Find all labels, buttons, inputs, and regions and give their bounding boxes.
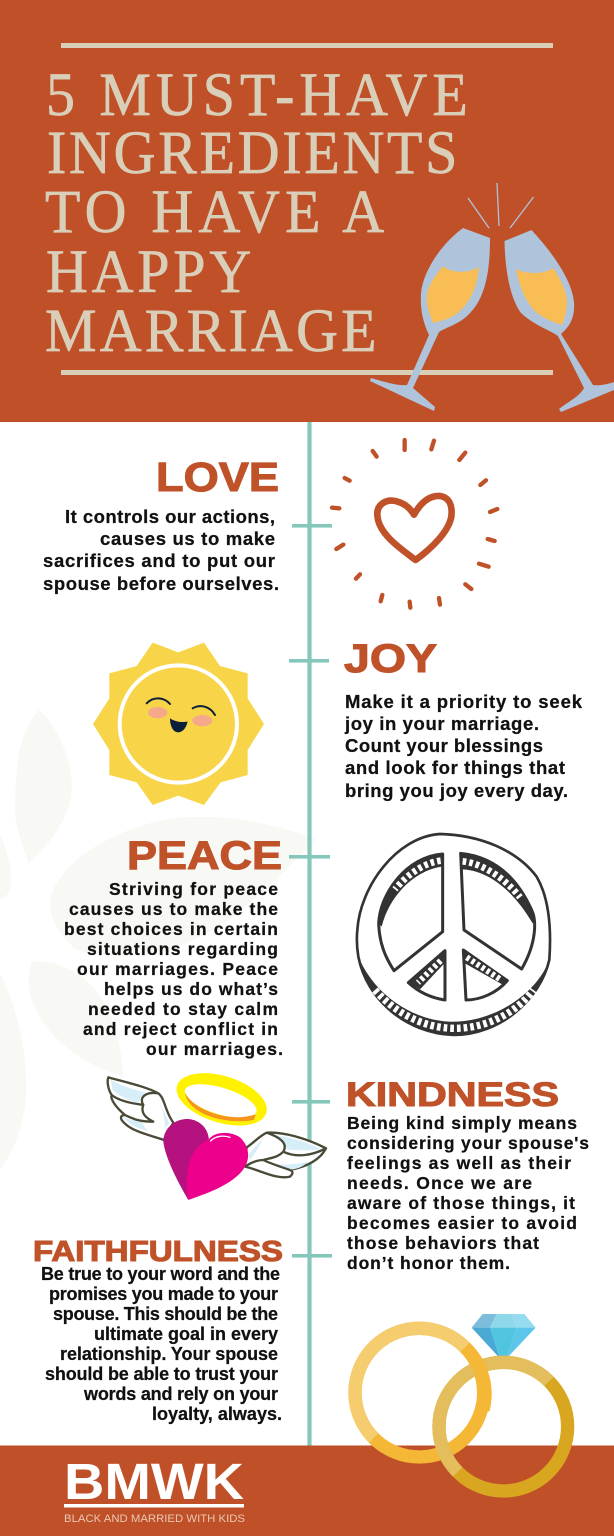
text: peace: Striving for peace — [109, 879, 278, 899]
panel: peace — [64, 834, 550, 1059]
panel: kindness — [108, 1063, 589, 1273]
text: peace: best choices in certain — [64, 919, 278, 939]
text: joy: Count your blessings — [345, 735, 543, 756]
text: joy: and look for things that — [345, 757, 565, 778]
text: faithfulness: Be true to your word and the — [41, 1264, 280, 1284]
text: faithfulness: ultimate goal in every — [94, 1324, 278, 1344]
text: love: spouse before ourselves. — [43, 573, 279, 594]
title — [45, 61, 468, 364]
panel: joy — [93, 637, 583, 805]
text: kindness: needs. Once we are — [347, 1173, 532, 1193]
text: peace: causes us to make the — [69, 899, 278, 919]
text: peace — [64, 879, 283, 1059]
text: joy: Make it a priority to seek — [345, 691, 583, 712]
text: faithfulness — [41, 1264, 282, 1424]
background leaves — [0, 710, 317, 1170]
text: faithfulness: should be able to trust your — [45, 1364, 278, 1384]
text: peace: our marriages. — [146, 1039, 283, 1059]
text: kindness: feelings as well as their — [347, 1153, 571, 1173]
text: peace: our marriages. Peace — [77, 959, 278, 979]
text: kindness: considering your spouse's — [347, 1133, 589, 1153]
heading: joy: JOY — [344, 637, 437, 681]
text: kindness: those behaviors that — [347, 1233, 539, 1253]
timeline — [289, 422, 332, 1446]
panel: header — [0, 0, 614, 422]
text: faithfulness: spouse. This should be the — [53, 1304, 278, 1324]
text: peace: situations regarding — [87, 939, 278, 959]
icon: winged heart with halo — [108, 1063, 326, 1200]
heading: faithfulness: FAITHFULNESS — [33, 1236, 283, 1268]
icon: smiling sun — [93, 643, 264, 805]
title: 5 MUST-HAVE — [46, 61, 468, 128]
text: faithfulness: relationship. Your spouse — [60, 1344, 278, 1364]
text: love: causes us to make — [100, 528, 275, 549]
heading: love: LOVE — [156, 454, 279, 500]
text: faithfulness: loyalty, always. — [152, 1404, 282, 1424]
text: kindness: aware of those things, it — [347, 1193, 575, 1213]
text: faithfulness: promises you made to your — [49, 1284, 278, 1304]
text: kindness — [347, 1113, 589, 1273]
title: INGREDIENTS — [47, 119, 457, 186]
logo: BMWK: BMWK — [64, 1453, 244, 1510]
text: kindness: Being kind simply means — [347, 1113, 577, 1133]
heading: peace: PEACE — [127, 834, 282, 878]
footer band — [0, 1446, 614, 1536]
text: love: sacrifices and to put our — [43, 550, 275, 571]
panel: faithfulness — [33, 1236, 568, 1491]
icon: champagne glasses — [370, 183, 614, 412]
icon: heart with rays — [332, 440, 497, 608]
heading: kindness: KINDNESS — [346, 1076, 559, 1114]
title: MARRIAGE — [45, 297, 377, 364]
text: joy — [344, 691, 583, 801]
text: peace: and reject conflict in — [83, 1019, 278, 1039]
text: joy: joy in your marriage. — [344, 713, 539, 734]
panel: love — [43, 440, 497, 608]
text: faithfulness: words and rely on your — [83, 1384, 278, 1404]
text: peace: helps us do what’s — [104, 979, 278, 999]
text: joy: bring you joy every day. — [345, 780, 568, 801]
icon: wedding rings with diamond — [355, 1314, 568, 1491]
text: kindness: don’t honor them. — [347, 1253, 510, 1273]
icon: peace sign — [357, 834, 550, 1035]
title: TO HAVE A — [45, 178, 384, 245]
text: kindness: becomes easier to avoid — [347, 1213, 577, 1233]
logo: BMWK: BLACK AND MARRIED WITH KIDS — [64, 1513, 245, 1525]
title: HAPPY — [46, 238, 251, 305]
text: love: It controls our actions, — [65, 506, 275, 527]
text: love — [43, 506, 279, 594]
text: peace: needed to stay calm — [88, 999, 278, 1019]
